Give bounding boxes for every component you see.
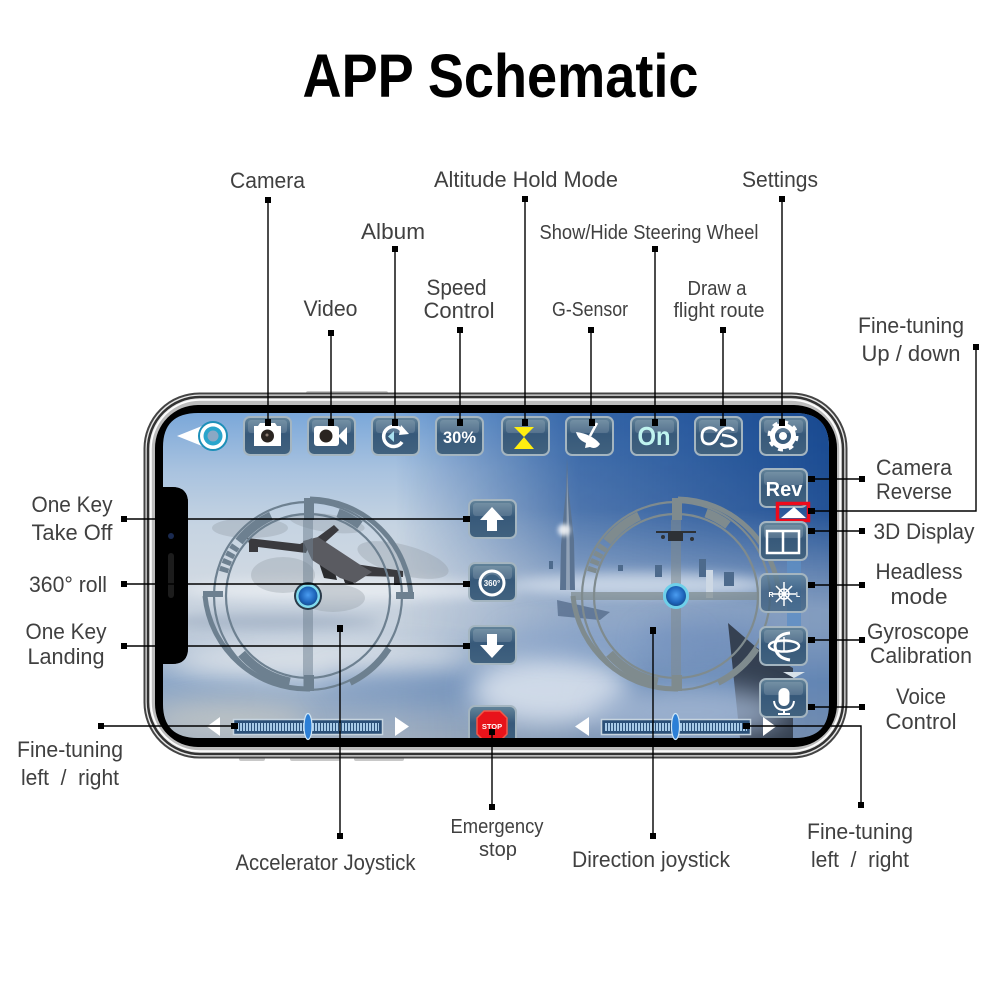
right joystick — [571, 498, 779, 691]
top labels: Show/Hide Steering Wheel — [540, 222, 758, 244]
leader line end points — [98, 196, 979, 839]
button: down — [469, 626, 516, 664]
back button icon — [177, 422, 227, 450]
left labels: left / right — [21, 765, 119, 790]
right labels: Reverse — [876, 479, 952, 504]
button: on: On — [638, 421, 670, 451]
button: headless: L — [796, 592, 801, 599]
right labels: Headless — [876, 559, 962, 584]
button: altitude hold — [502, 417, 549, 455]
right joystick thumb — [663, 583, 689, 609]
button: camera — [244, 417, 291, 455]
bottom labels: Accelerator Joystick — [236, 850, 416, 875]
button: voice — [760, 679, 807, 717]
button: album — [372, 417, 419, 455]
button: headless: R — [768, 592, 774, 599]
top labels — [230, 167, 818, 323]
left labels: Fine-tuning — [17, 737, 123, 762]
steering track on right — [783, 560, 805, 678]
left joystick — [203, 498, 414, 691]
top labels: Settings — [742, 167, 818, 192]
button: 360 roll — [469, 563, 516, 601]
notch details — [163, 487, 188, 664]
button: emergency stop: STOP — [482, 722, 502, 731]
button: draw route — [695, 417, 742, 455]
bottom labels: stop — [479, 839, 517, 861]
button: settings — [760, 417, 807, 455]
left fine-tuning slider — [207, 714, 409, 740]
button: video — [308, 417, 355, 455]
title: APP Schematic — [302, 42, 698, 110]
top labels: flight route — [674, 300, 764, 322]
right labels: Calibration — [870, 643, 972, 668]
left labels — [17, 492, 123, 790]
left labels: Landing — [28, 644, 104, 669]
button: rev — [760, 469, 807, 507]
left labels: One Key — [26, 619, 106, 644]
right labels: Fine-tuning — [858, 313, 964, 338]
right labels: mode — [890, 584, 948, 609]
bottom labels: Direction joystick — [572, 847, 731, 872]
leader lines — [101, 199, 976, 836]
top labels: Draw a — [688, 278, 747, 300]
top labels: G-Sensor — [552, 299, 628, 321]
left labels: Take Off — [32, 520, 113, 545]
top labels: Speed — [426, 275, 486, 300]
burj tower — [557, 458, 610, 620]
button: rev: Rev — [766, 479, 803, 501]
top labels: Album — [361, 219, 425, 244]
right labels: Gyroscope — [867, 619, 969, 644]
bottom labels: Fine-tuning — [807, 819, 913, 844]
distant buildings — [549, 559, 734, 598]
left labels: 360° roll — [29, 572, 107, 597]
right labels: Voice — [896, 684, 946, 709]
right labels: Camera — [876, 455, 953, 480]
button: gyroscope — [760, 627, 807, 665]
button: on — [631, 417, 678, 455]
dark building bottom right — [728, 623, 793, 738]
button: g-sensor — [566, 417, 613, 455]
button: emergency stop — [469, 706, 516, 744]
top labels: Camera — [230, 168, 306, 193]
phone frame — [144, 391, 846, 761]
right labels: Up / down — [862, 341, 960, 366]
left joystick thumb — [294, 582, 322, 610]
button: 3d display — [760, 522, 807, 560]
button: 360 roll: 360° — [484, 579, 500, 588]
bottom labels — [236, 816, 913, 875]
right labels — [858, 313, 974, 734]
bottom labels: Emergency — [450, 816, 544, 838]
button: speed 30% — [436, 417, 483, 455]
right labels: Control — [886, 709, 956, 734]
button: up — [469, 500, 516, 538]
button: speed 30%: 30% — [443, 429, 476, 447]
top labels: Altitude Hold Mode — [434, 167, 618, 192]
bottom labels: left / right — [811, 847, 909, 872]
right labels: 3D Display — [874, 519, 974, 544]
screen background: sky and clouds — [150, 410, 835, 742]
fine-tuning up arrow in red box — [778, 504, 808, 520]
drone illustration — [212, 509, 452, 612]
top labels: Video — [304, 296, 358, 321]
top labels: Control — [424, 298, 494, 323]
left labels: One Key — [32, 492, 112, 517]
right fine-tuning slider — [575, 714, 776, 740]
button: headless — [760, 574, 807, 612]
